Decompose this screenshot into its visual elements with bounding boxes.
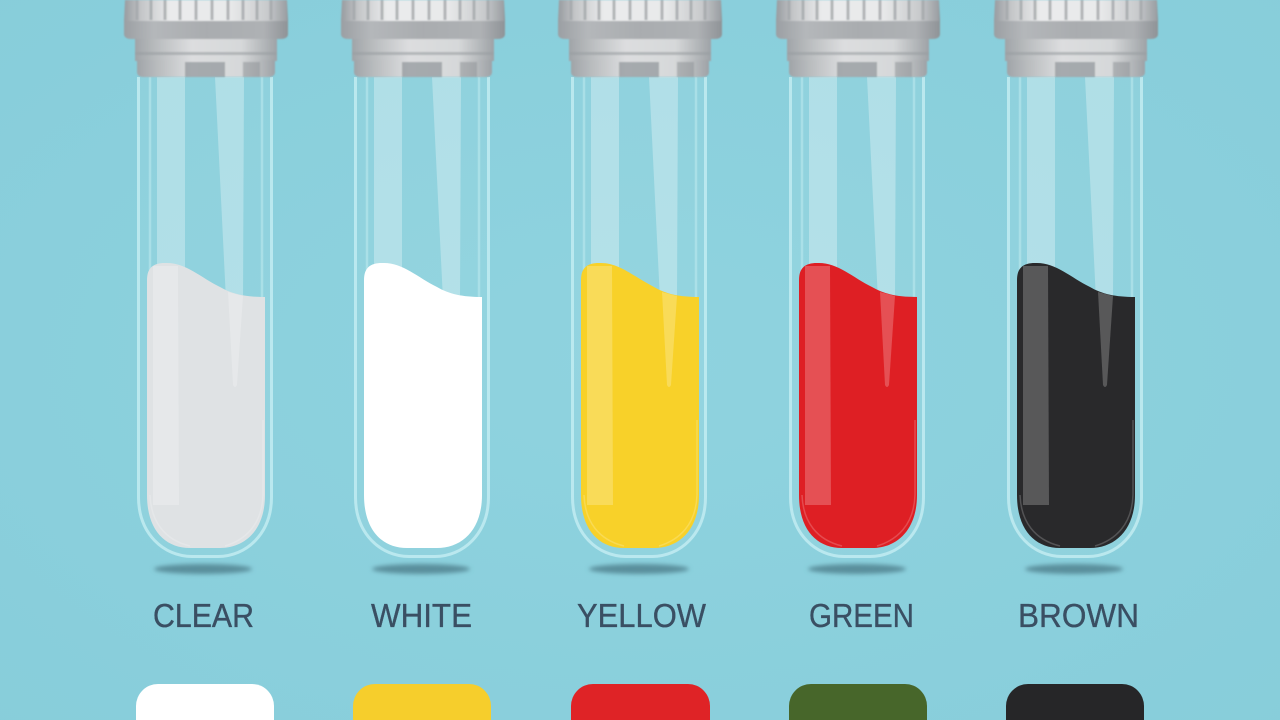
swatch: white: [136, 684, 274, 720]
shadow: [808, 564, 906, 574]
cap: [341, 0, 505, 77]
shadow: [372, 564, 470, 574]
tube: clear: [124, 0, 288, 574]
liquid: clear: [147, 263, 265, 548]
swatch: red: [571, 684, 710, 720]
highlights: [150, 266, 263, 546]
glass: [1007, 77, 1143, 558]
liquid: yellow: [581, 263, 699, 548]
label: brown: BROWN: [1018, 597, 1139, 634]
tube: green label, red liquid: [776, 0, 940, 574]
glass: [137, 77, 273, 558]
tube: yellow: [558, 0, 722, 574]
label: yellow: YELLOW: [577, 597, 707, 634]
highlights: [802, 266, 915, 546]
highlights: [1020, 266, 1133, 546]
glass: [789, 77, 925, 558]
shadow: [589, 564, 689, 574]
glass rim: [790, 77, 924, 556]
tube: white: [341, 0, 505, 574]
shadow: [1025, 564, 1123, 574]
swatch: black: [1006, 684, 1144, 720]
tube: brown label, black liquid: [994, 0, 1158, 574]
liquid: black: [1017, 263, 1135, 548]
liquid: white: [364, 263, 482, 548]
cap: [776, 0, 940, 77]
cap: [558, 0, 722, 77]
liquid: red: [799, 263, 917, 548]
glass rim: [1008, 77, 1142, 556]
glass rim: [138, 77, 272, 556]
highlights: [584, 266, 697, 546]
label: white: WHITE: [371, 597, 472, 634]
label: green: GREEN: [809, 597, 914, 634]
shadow: [154, 564, 252, 574]
glass rim: [356, 77, 488, 556]
cap: [124, 0, 288, 77]
glass: [571, 77, 707, 558]
cap: [994, 0, 1158, 77]
label: clear: CLEAR: [153, 597, 254, 634]
glass: [354, 77, 490, 558]
swatch: green: [789, 684, 927, 720]
swatch: yellow: [353, 684, 491, 720]
glass rim: [572, 77, 706, 556]
